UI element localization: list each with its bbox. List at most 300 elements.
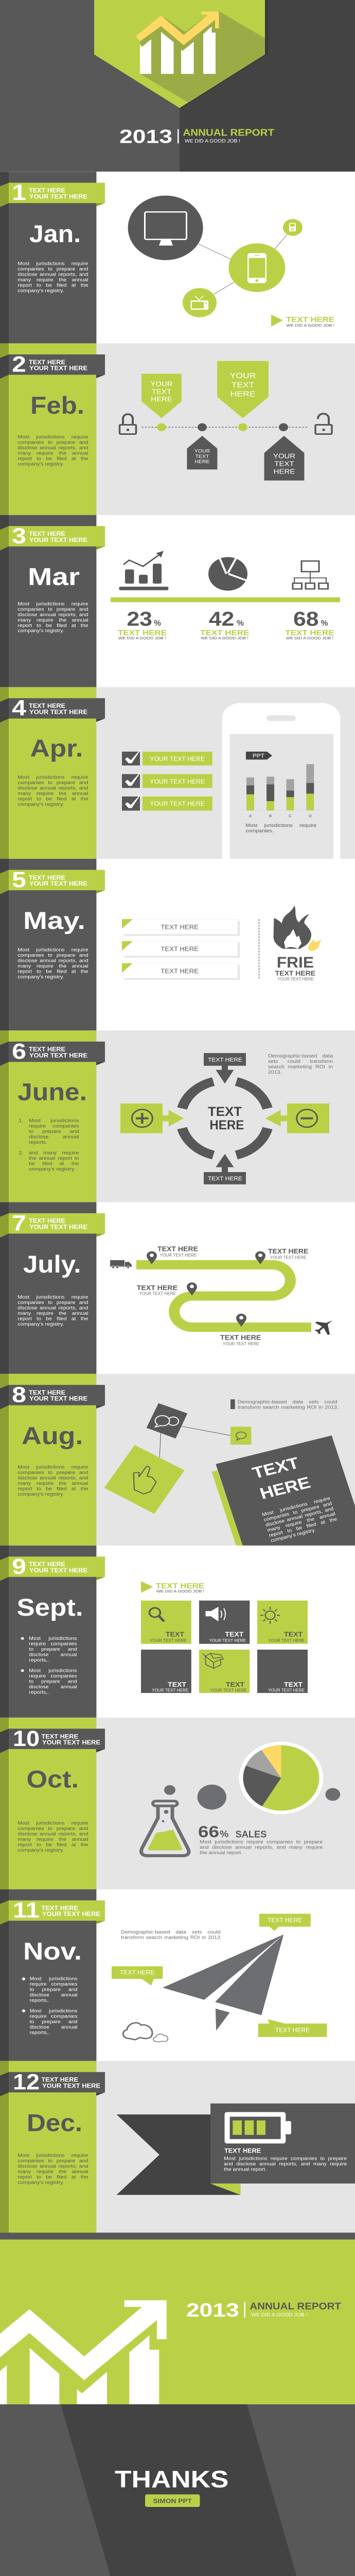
section 6: June	[0, 1030, 355, 1202]
body text: Most jurisdictions require	[17, 1821, 88, 1826]
side panel	[0, 1374, 96, 1546]
numbered list: be filed at the	[29, 1161, 79, 1166]
checklist item 1: YOUR TEXT HERE	[150, 756, 205, 762]
stat 68%	[285, 607, 334, 640]
road label 1	[157, 1246, 198, 1258]
list box 3: TEXT HERE	[161, 968, 199, 975]
ribbon 1	[0, 180, 105, 207]
ribbon 10: YOUR TEXT HERE	[42, 1739, 100, 1746]
ribbon 2: YOUR TEXT HERE	[29, 365, 87, 371]
description text: 2013.	[268, 1070, 282, 1075]
road label 2: YOUR TEXT HERE	[270, 1255, 307, 1260]
body text: Most jurisdictions require	[17, 2153, 88, 2158]
road label 1: YOUR TEXT HERE	[160, 1253, 197, 1258]
minus box with arrow	[265, 1104, 329, 1133]
section 4: April	[0, 687, 355, 859]
ribbon 11	[0, 1897, 105, 1925]
callout: text here: TEXT HERE	[156, 1582, 204, 1590]
side panel	[0, 859, 96, 1031]
month heading: Aug.	[22, 1422, 83, 1449]
road label 3: YOUR TEXT HERE	[139, 1291, 176, 1296]
body text: company's registry.	[17, 288, 64, 294]
road label 3: TEXT HERE	[137, 1284, 177, 1292]
ribbon 2: 2	[12, 352, 26, 377]
centre text: HERE	[209, 1118, 244, 1132]
bullet list: require companies	[29, 1674, 77, 1679]
body text: Most jurisdictions require	[17, 1295, 88, 1300]
ribbon 5	[0, 867, 105, 894]
body text: report to be filed at the	[17, 283, 88, 288]
ribbon 12: 12	[13, 2070, 40, 2094]
grey tag large: TEXT	[274, 460, 294, 468]
body text	[17, 601, 88, 634]
stat 23%: %	[154, 619, 161, 628]
bottom label with arrow: TEXT HERE	[208, 1175, 242, 1182]
numbered list: 2.	[19, 1150, 23, 1156]
closing panel	[0, 2404, 355, 2576]
icon: org chart	[293, 561, 328, 589]
body text: companies to prepare and	[17, 2159, 88, 2164]
bullet list: disclose annual	[29, 1685, 77, 1690]
sales text	[200, 1840, 323, 1856]
bullet list: reports,.	[30, 2030, 49, 2036]
month heading: Nov.	[23, 1938, 82, 1965]
side panel	[0, 687, 96, 859]
ribbon 3: YOUR TEXT HERE	[29, 536, 87, 544]
icon: closed lock	[119, 414, 136, 434]
bullet list: to prepare and	[30, 2019, 78, 2025]
stacked bar chart	[240, 764, 320, 818]
footer title	[186, 2300, 341, 2321]
footer title: ANNUAL REPORT	[250, 2301, 341, 2312]
callout left	[112, 1967, 163, 1986]
dark ribbon tail	[117, 2114, 241, 2195]
body text: report to be filed at the	[17, 623, 88, 629]
ribbon 11: YOUR TEXT HERE	[42, 1910, 100, 1918]
ribbon 3	[0, 523, 105, 550]
panel heading: TEXT HERE	[224, 2147, 261, 2154]
tilted text panel: TEXT	[250, 1454, 301, 1482]
tile: sun: TEXT	[284, 1631, 303, 1638]
numbered list: 1.	[19, 1118, 23, 1124]
ribbon 1: 1	[12, 180, 26, 205]
bullet list: Most jurisdictions	[30, 2009, 78, 2014]
tilted text panel	[211, 1435, 355, 1546]
icon: clouds	[123, 2023, 168, 2042]
divider bar	[111, 597, 340, 602]
bottom label with arrow	[204, 1154, 246, 1184]
body text: Most jurisdictions require	[17, 601, 88, 607]
body text: companies to prepare and	[17, 953, 88, 958]
phone caption: Most jurisdictions require	[245, 823, 317, 828]
stat 42%: TEXT HERE	[200, 629, 249, 637]
road label 4: TEXT HERE	[220, 1334, 261, 1341]
paper plane	[163, 1935, 283, 2030]
fire text	[275, 954, 315, 981]
dashed separator	[258, 919, 259, 978]
note text: transform search marketing ROI in 2013.	[121, 1935, 222, 1940]
icon: music player circle	[283, 219, 303, 236]
icon: battery	[224, 2112, 291, 2144]
body text: disclose annual reports, and	[17, 612, 88, 618]
top label with arrow: TEXT HERE	[208, 1056, 242, 1063]
centre text	[208, 1105, 244, 1132]
section 10: October	[0, 1718, 355, 1890]
body text: disclose annual reports, and	[17, 786, 88, 791]
ribbon 2	[0, 352, 105, 379]
tilted text panel: Most jurisdictions require	[261, 1496, 331, 1518]
body text: many require the annual	[17, 451, 88, 456]
tile: box: YOUR TEXT HERE	[210, 1688, 247, 1692]
list box 2	[122, 941, 240, 958]
ribbon 4: TEXT HERE	[29, 702, 65, 709]
bullet list: Most jurisdictions	[29, 1636, 77, 1641]
top note: Demographic-based data sets could	[238, 1400, 338, 1405]
side panel	[0, 515, 96, 688]
numbered list: reports.	[29, 1140, 47, 1145]
body text: report to be filed at the	[17, 1842, 88, 1848]
top note	[230, 1399, 339, 1410]
callout: text here: WE DID A GOOD JOB !	[287, 323, 334, 328]
tile: dark text right: YOUR TEXT HERE	[268, 1688, 305, 1692]
decorative bubbles	[164, 1785, 340, 1809]
ribbon 10: TEXT HERE	[41, 1733, 78, 1740]
side panel	[0, 1546, 96, 1718]
ribbon 4: YOUR TEXT HERE	[29, 708, 87, 716]
stat 42%: 42	[209, 607, 234, 630]
body text	[17, 1465, 88, 1497]
ribbon 9: 9	[12, 1554, 26, 1579]
body text: many require the annual	[17, 618, 88, 623]
month heading: Dec.	[27, 2109, 82, 2137]
icon: phone circle	[228, 243, 285, 292]
connector lines	[159, 1426, 230, 1458]
ribbon 8	[0, 1382, 105, 1409]
phone mockup	[222, 703, 340, 859]
numbered list: require companies	[29, 1124, 79, 1129]
sales stat: %	[220, 1829, 228, 1839]
body text: companies to prepare and	[17, 267, 88, 272]
fire text: TEXT HERE	[275, 969, 315, 977]
tile: search: TEXT	[166, 1631, 184, 1638]
section 3: March	[0, 515, 355, 688]
green tag small: YOUR	[150, 380, 173, 388]
road label 3	[137, 1284, 177, 1296]
body text: company's registry.	[17, 974, 64, 980]
header hexagon badge	[94, 0, 265, 108]
body text: disclose annual reports, and	[17, 446, 88, 451]
month heading: Apr.	[30, 735, 83, 762]
tile: search	[141, 1601, 191, 1644]
sales text: the annual report.	[200, 1851, 242, 1856]
body text: company's registry.	[17, 462, 64, 467]
grey tag large	[264, 436, 304, 481]
ribbon 5: TEXT HERE	[29, 874, 65, 881]
bullet list: require companies	[30, 1982, 78, 1987]
tilted text panel: report to be filed at the	[268, 1517, 338, 1538]
note text	[121, 1930, 222, 1940]
note text: Demographic-based data sets could	[121, 1930, 221, 1935]
callout top: TEXT HERE	[268, 1917, 302, 1924]
body text: company's registry.	[17, 802, 64, 807]
ribbon green fold	[210, 2183, 241, 2195]
bullet list: reports,.	[30, 1998, 49, 2003]
description text	[268, 1054, 333, 1075]
bullet list	[21, 1636, 77, 1695]
sales stat	[198, 1823, 267, 1841]
section 5: May	[0, 859, 355, 1031]
top note: transform search marketing ROI in 2013.	[238, 1405, 339, 1410]
body text	[17, 435, 88, 467]
phone caption	[245, 823, 317, 834]
section 7: July	[0, 1202, 355, 1374]
body text: disclose annual reports, and	[17, 272, 88, 277]
section 2: February	[0, 343, 355, 516]
sales stat: SALES	[236, 1829, 267, 1840]
icon: white rising bars	[140, 27, 216, 74]
ribbon 2: TEXT HERE	[29, 359, 65, 366]
side panel	[0, 1718, 96, 1890]
tile: box: TEXT	[226, 1681, 244, 1688]
body text	[17, 261, 88, 294]
ribbon 12: TEXT HERE	[41, 2076, 78, 2083]
stat 23%: WE DID A GOOD JOB !	[118, 636, 166, 640]
ribbon 1: YOUR TEXT HERE	[29, 193, 87, 200]
list box 1: TEXT HERE	[161, 923, 199, 930]
side panel	[0, 1889, 96, 2061]
callout: text here: WE DID A GOOD JOB !	[156, 1588, 204, 1594]
green tag small	[141, 374, 182, 418]
header title: WE DID A GOOD JOB !	[185, 139, 240, 144]
grey tag small	[187, 436, 217, 469]
grey tag small: TEXT	[196, 454, 209, 460]
plus box with arrow	[120, 1104, 184, 1133]
numbered list: company's registry.	[29, 1167, 75, 1172]
bullet list: require companies	[30, 2014, 78, 2019]
ribbon 9: YOUR TEXT HERE	[29, 1567, 87, 1574]
callout top	[259, 1914, 311, 1931]
timeline dashed line	[141, 427, 308, 428]
ribbon 10: 10	[13, 1726, 40, 1751]
icon: flask	[141, 1801, 189, 1856]
section 11: November	[0, 1889, 355, 2061]
body text: companies to prepare and	[17, 440, 88, 445]
checklist item 2: YOUR TEXT HERE	[150, 778, 205, 785]
ribbon 7	[0, 1211, 105, 1238]
fire text: YOUR TEXT HERE	[277, 977, 314, 981]
tile: dark text left: YOUR TEXT HERE	[152, 1688, 189, 1692]
body text: companies to prepare and	[17, 781, 88, 786]
sales stat: 66	[198, 1823, 219, 1841]
body text: companies to prepare and	[17, 1470, 88, 1476]
side panel	[0, 2061, 96, 2233]
tilted text panel: many require the annual	[267, 1512, 336, 1533]
tile: speaker: YOUR TEXT HERE	[209, 1638, 246, 1643]
white growth arrow	[0, 2300, 167, 2380]
icon: truck	[110, 1260, 132, 1268]
thanks heading: THANKS	[115, 2466, 228, 2493]
icon: open lock	[315, 414, 332, 434]
tile: search: YOUR TEXT HERE	[150, 1638, 187, 1643]
winding road	[136, 1265, 311, 1327]
ribbon 10	[0, 1726, 105, 1753]
month heading: Oct.	[27, 1766, 79, 1792]
device network lines	[198, 234, 287, 294]
ribbon 6	[0, 1039, 105, 1066]
stat 42%	[200, 607, 249, 640]
body text: report to be filed at the	[17, 2175, 88, 2180]
ribbon 1: TEXT HERE	[29, 187, 65, 194]
stat 68%: %	[321, 619, 328, 628]
body text: Most jurisdictions require	[17, 261, 88, 266]
bullet list: disclose annual	[29, 1652, 77, 1657]
icon: bar chart with arrow	[119, 551, 168, 590]
header title	[119, 126, 274, 147]
numbered list: to prepare and	[29, 1129, 79, 1134]
tilted chat tile	[147, 1403, 187, 1438]
ribbon 9	[0, 1554, 105, 1581]
list box 3	[122, 963, 240, 980]
ribbon 11: 11	[13, 1897, 40, 1922]
body text: Most jurisdictions require	[17, 947, 88, 953]
body text: companies to prepare and	[17, 607, 88, 612]
ribbon 7: 7	[12, 1211, 26, 1235]
ribbon 6: YOUR TEXT HERE	[29, 1052, 87, 1059]
description text: sets could transform	[268, 1059, 333, 1064]
bullet list: Most jurisdictions	[29, 1668, 77, 1673]
callout left: TEXT HERE	[120, 1969, 155, 1976]
body text: disclose annual reports, and	[17, 1832, 88, 1837]
tilted text panel: disclose annual reports, and	[265, 1506, 334, 1528]
panel text: and disclose annual reports, and many require	[224, 2162, 347, 2167]
pie chart with ring	[239, 1742, 323, 1814]
green tag small: HERE	[151, 395, 172, 403]
stacked bar chart: D	[309, 814, 312, 818]
white bars	[0, 2335, 159, 2404]
month heading: Sept.	[16, 1594, 83, 1621]
numbered list	[19, 1118, 79, 1172]
bullet list: to prepare and	[29, 1647, 77, 1652]
ribbon 5: YOUR TEXT HERE	[29, 880, 87, 887]
stacked bar chart: B	[269, 814, 272, 818]
body text: company's registry.	[17, 629, 64, 634]
PPT tag: PPT	[253, 753, 264, 759]
grey tag small: HERE	[194, 460, 210, 465]
sales text: and disclose annual reports, and many require	[200, 1845, 323, 1850]
month heading: June.	[17, 1078, 87, 1106]
numbered list: Most jurisdictions	[29, 1118, 79, 1124]
body text: many require the annual	[17, 1481, 88, 1486]
ribbon 3: TEXT HERE	[29, 530, 65, 537]
tile: sun	[257, 1601, 308, 1644]
stat 68%: 68	[293, 607, 319, 630]
list box 1	[122, 919, 240, 936]
stat 23%: TEXT HERE	[118, 629, 167, 637]
body text: Most jurisdictions require	[17, 1465, 88, 1470]
stat 68%: WE DID A GOOD JOB !	[286, 636, 333, 640]
body text: many require the annual	[17, 1837, 88, 1842]
footer title: 2013	[186, 2300, 239, 2321]
header title: 2013	[119, 126, 172, 147]
tile: speaker: TEXT	[225, 1631, 244, 1638]
tile: dark text left	[141, 1650, 191, 1693]
description text: search marketing ROI in	[268, 1064, 333, 1070]
green tag small: TEXT	[152, 387, 172, 395]
green tag large: YOUR	[230, 371, 256, 380]
callout: text here	[271, 315, 334, 328]
ribbon 12	[0, 2070, 105, 2096]
body text: many require the annual	[17, 1311, 88, 1316]
stat 68%: TEXT HERE	[285, 629, 334, 637]
hexagon long shadow	[140, 11, 265, 102]
body text	[17, 1295, 88, 1327]
grey tag small: YOUR	[194, 449, 210, 454]
body text: company's registry.	[17, 1492, 64, 1497]
body text	[17, 775, 88, 807]
month heading: July.	[23, 1251, 81, 1278]
body text: report to be filed at the	[17, 969, 88, 974]
road label 1: TEXT HERE	[157, 1246, 198, 1252]
callout: text here: TEXT HERE	[286, 316, 334, 324]
icon: pie chart	[208, 557, 249, 591]
author badge	[145, 2495, 200, 2507]
author badge: SIMON PPT	[153, 2497, 192, 2504]
tile: box	[199, 1650, 250, 1693]
road label 4: YOUR TEXT HERE	[223, 1341, 259, 1346]
ring of four arcs	[182, 1081, 268, 1155]
ribbon 6: 6	[12, 1039, 26, 1063]
section 8: August	[0, 1374, 355, 1546]
footer title: WE DID A GOOD JOB !	[251, 2313, 307, 2318]
ribbon 9: TEXT HERE	[29, 1561, 65, 1568]
checklist item 2	[122, 770, 212, 788]
month heading: Feb.	[30, 392, 84, 419]
pin 2	[255, 1251, 265, 1264]
body text: disclose annual reports, and	[17, 2164, 88, 2169]
ribbon 5: 5	[12, 867, 26, 892]
icon: monitor circle	[128, 196, 203, 260]
pin 4	[236, 1314, 246, 1327]
side panel	[0, 343, 96, 516]
icon: yellow growth arrow	[136, 11, 219, 45]
list box 2: TEXT HERE	[161, 945, 199, 953]
icon: fire	[274, 905, 322, 951]
stat 23%	[118, 607, 167, 640]
tile: speaker	[199, 1601, 250, 1644]
body text: report to be filed at the	[17, 1486, 88, 1492]
ribbon 4	[0, 696, 105, 722]
body text	[17, 1821, 88, 1853]
road label 2: TEXT HERE	[268, 1248, 308, 1255]
numbered list: the annual report to	[29, 1156, 79, 1161]
pin 1	[147, 1251, 157, 1264]
tile: sun: YOUR TEXT HERE	[268, 1638, 305, 1643]
body text: report to be filed at the	[17, 796, 88, 802]
bullet list: reports,.	[29, 1658, 49, 1663]
body text	[17, 2153, 88, 2185]
panel text: Most jurisdictions require companies to prepare	[224, 2156, 347, 2161]
footer green banner	[0, 2233, 355, 2404]
dark content panel	[210, 2104, 355, 2183]
side panel	[0, 172, 96, 344]
ribbon 3: 3	[12, 523, 26, 548]
sales text: Most jurisdictions require companies to prepare	[200, 1840, 323, 1845]
callout bottom: TEXT HERE	[275, 2027, 310, 2033]
stat 23%: 23	[127, 607, 152, 630]
bullet list: reports,.	[29, 1690, 49, 1695]
centre text: TEXT	[208, 1105, 242, 1118]
tile: dark text right: TEXT	[284, 1681, 303, 1688]
